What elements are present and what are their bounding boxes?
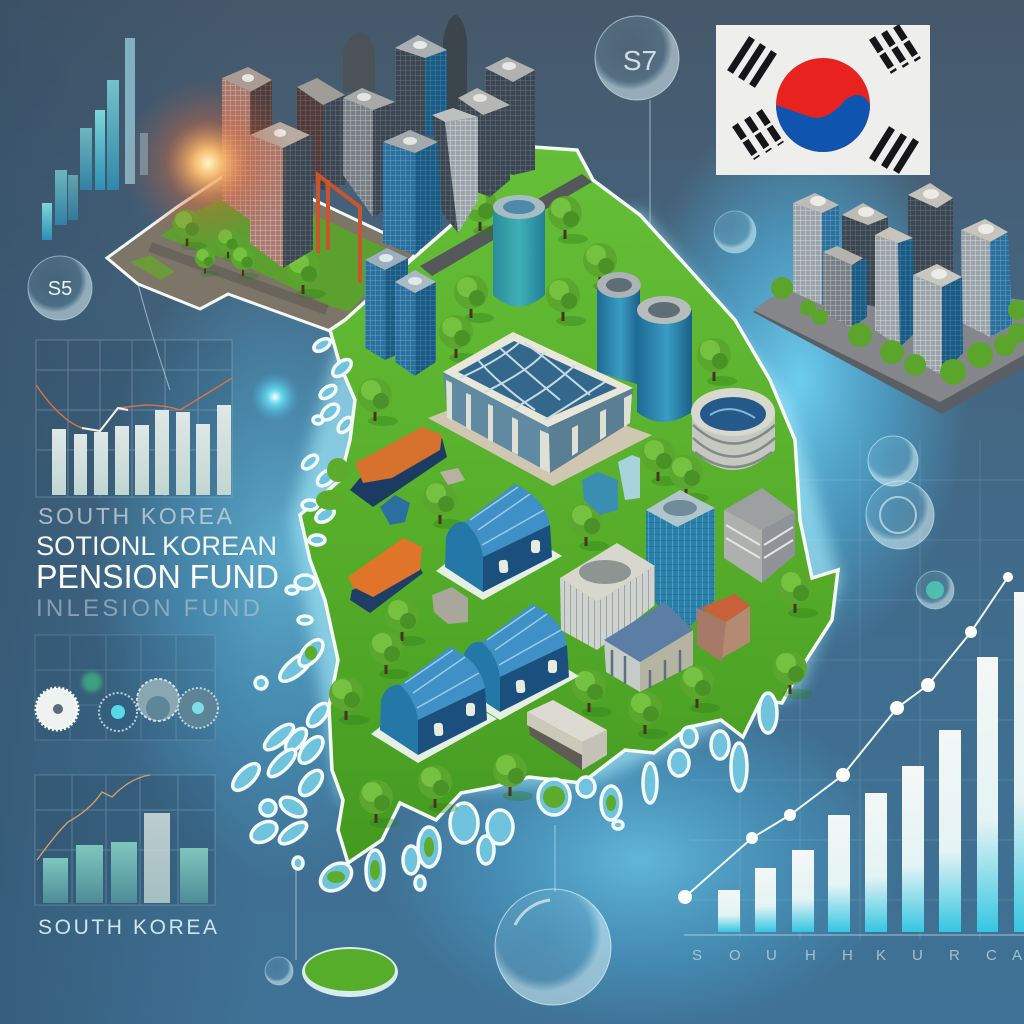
water tank — [691, 388, 775, 470]
red tower rear — [222, 67, 272, 220]
glow orb left — [251, 373, 299, 421]
chart axis labels: R — [949, 947, 960, 964]
bubble: S7: S7 — [623, 45, 657, 76]
green orb — [916, 571, 954, 609]
sun flare — [123, 78, 293, 248]
big water bubble — [495, 889, 611, 1005]
title text block — [36, 503, 279, 622]
low white warehouse — [527, 700, 607, 770]
glassy tower — [432, 108, 478, 233]
back tower — [908, 183, 953, 285]
grey tower — [343, 88, 395, 217]
chart axis labels — [692, 947, 1022, 964]
small bubble right of map — [714, 211, 756, 253]
small chart top left — [42, 38, 148, 240]
teal glass tower — [646, 490, 715, 640]
orange freight truck — [350, 427, 465, 525]
trigram bottom right — [872, 128, 916, 172]
title text block: INLESION FUND — [36, 595, 260, 622]
orange crane — [318, 175, 360, 283]
chart axis labels: A — [1012, 947, 1022, 964]
chart: bars lower left — [35, 775, 215, 905]
small blue cube tanks — [582, 455, 640, 515]
blue tower — [383, 130, 442, 255]
teal cylinder tower — [493, 195, 545, 306]
title text block: SOTIONL KOREAN — [36, 531, 277, 561]
title text block: PENSION FUND — [36, 558, 279, 595]
chart axis labels: O — [729, 947, 741, 964]
dark brown tower — [297, 78, 345, 190]
coastal glow — [290, 210, 840, 800]
far spire — [343, 32, 375, 92]
white office building — [560, 543, 655, 650]
dark tower — [842, 203, 888, 310]
mainland — [300, 147, 838, 863]
tall tower — [395, 35, 447, 135]
chart axis labels: C — [986, 947, 997, 964]
central glass-roof building — [428, 332, 652, 486]
bubble: S5 — [28, 256, 92, 320]
road — [420, 174, 592, 276]
front tower — [913, 264, 963, 375]
map of South Korea — [107, 147, 840, 897]
blue-roofed office — [604, 602, 693, 692]
chart axis labels: U — [912, 947, 923, 964]
trigram top right — [872, 26, 918, 72]
short tower — [823, 246, 867, 328]
title text block: SOUTH KOREA — [38, 503, 233, 529]
rear tower — [458, 88, 510, 197]
trigram top left — [730, 38, 774, 86]
small bubble beside island — [265, 957, 293, 985]
right ring bubbles — [866, 436, 934, 549]
background grid lines on right — [690, 440, 1024, 940]
grey office block — [724, 488, 795, 583]
chart axis labels: K — [876, 947, 886, 964]
orange-roofed block — [697, 594, 750, 662]
chart axis labels: U — [766, 947, 777, 964]
trigram bottom left — [735, 111, 781, 158]
blue storage barns — [371, 484, 579, 763]
chart axis labels: H — [805, 947, 816, 964]
rear tower — [485, 57, 535, 175]
hedges — [771, 277, 1024, 385]
small green island — [302, 947, 398, 997]
dark spire — [443, 15, 467, 110]
panel: gear icons — [35, 635, 218, 740]
pointer lines — [138, 100, 650, 960]
red tower front — [250, 122, 313, 268]
striped tower — [875, 227, 915, 347]
South Korean flag — [716, 25, 930, 175]
blue towers pair — [365, 248, 436, 376]
tower — [961, 219, 1012, 337]
right city on platform — [753, 183, 1024, 414]
label: south korea: SOUTH KOREA — [38, 916, 217, 939]
trees on the map — [173, 188, 818, 828]
bar and line chart bottom right — [678, 572, 1024, 935]
city cluster: towers top left — [123, 15, 535, 283]
green patches on islets — [305, 458, 616, 883]
northern platform — [107, 165, 420, 332]
chart: bars with line, left panel — [36, 340, 232, 497]
tower — [793, 193, 839, 305]
blue cylinder towers — [597, 272, 692, 422]
bubble: S7 — [595, 16, 679, 100]
chart axis labels: S — [692, 947, 702, 964]
bubble: S5: S5 — [48, 278, 72, 300]
chart axis labels: H — [842, 947, 853, 964]
coastal islets west and south — [228, 336, 777, 897]
orange loader truck — [348, 538, 468, 624]
